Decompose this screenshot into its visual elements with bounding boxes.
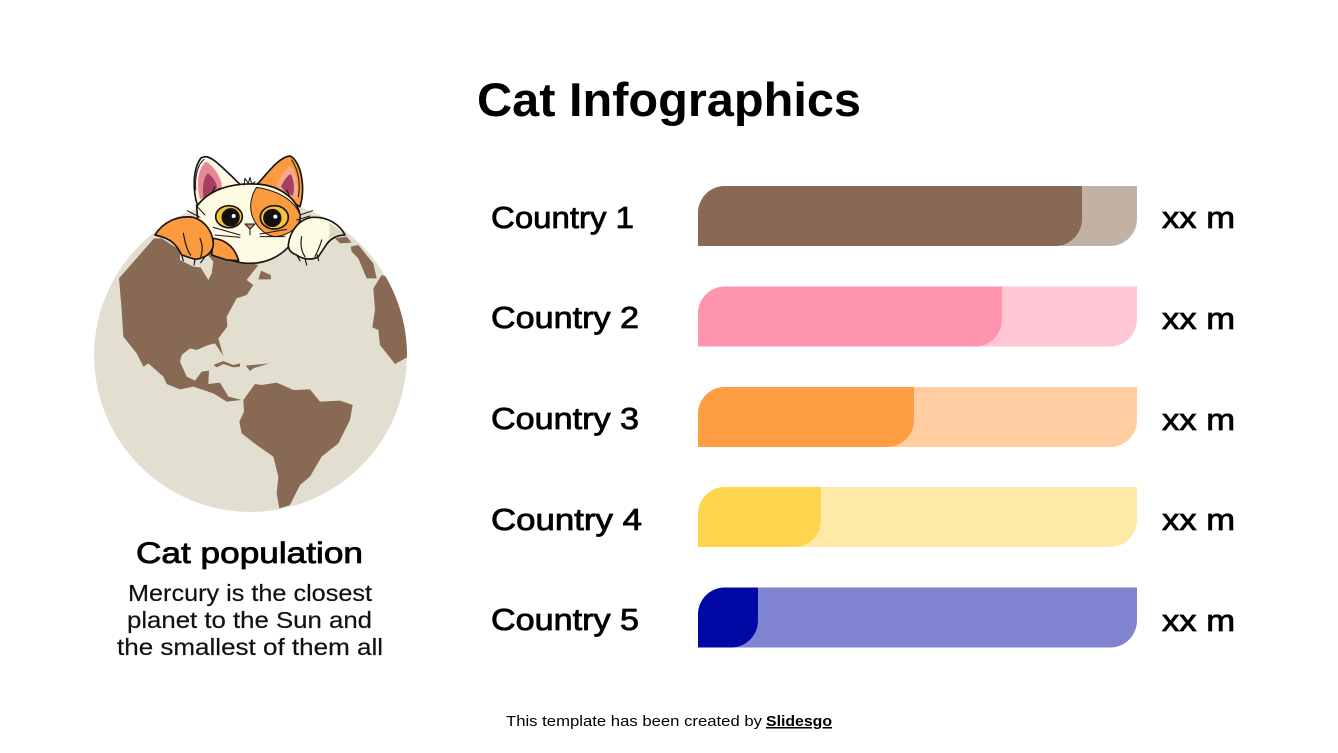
whiskers — [187, 205, 313, 237]
row: country 2 — [491, 286, 1235, 346]
row: country 4: Country 4 — [491, 502, 642, 537]
right ear — [257, 156, 303, 207]
left eye — [216, 206, 242, 228]
row: country 5: xx m — [1162, 603, 1235, 638]
footer credit: Slidesgo — [766, 713, 832, 730]
text block: description — [117, 580, 383, 660]
nose — [245, 224, 255, 235]
icon: cat peeking over globe — [155, 156, 345, 265]
row: country 1: Country 1 — [491, 200, 634, 235]
row: country 1: xx m — [1162, 200, 1235, 235]
text block: description: Mercury is the closest — [128, 580, 373, 606]
text block: description: planet to the Sun and — [127, 607, 372, 633]
orange face patch — [251, 187, 300, 237]
head tuft — [244, 177, 255, 185]
row: country 4: xx m — [1162, 502, 1235, 537]
orange chest patch — [212, 238, 239, 261]
right eye — [260, 206, 288, 229]
row: country 2: xx m — [1162, 301, 1235, 336]
row: country 3 — [491, 387, 1235, 447]
row: country 3: Country 3 — [491, 401, 639, 436]
right paw — [288, 217, 345, 265]
text block: description: the smallest of them all — [117, 634, 383, 660]
row: country 3: xx m — [1162, 402, 1235, 437]
row: country 4 — [491, 487, 1235, 547]
left ear — [194, 157, 241, 205]
title: Cat Infographics — [477, 73, 861, 126]
row: country 2: Country 2 — [491, 300, 639, 335]
left paw — [155, 217, 213, 265]
row: country 5: Country 5 — [491, 602, 639, 637]
row: country 5 — [491, 588, 1235, 648]
footer credit: This template has been created by — [506, 713, 763, 730]
globe illustration — [94, 199, 413, 512]
head — [197, 184, 300, 263]
row: country 1 — [491, 186, 1235, 246]
heading: cat population: Cat population — [136, 537, 363, 570]
